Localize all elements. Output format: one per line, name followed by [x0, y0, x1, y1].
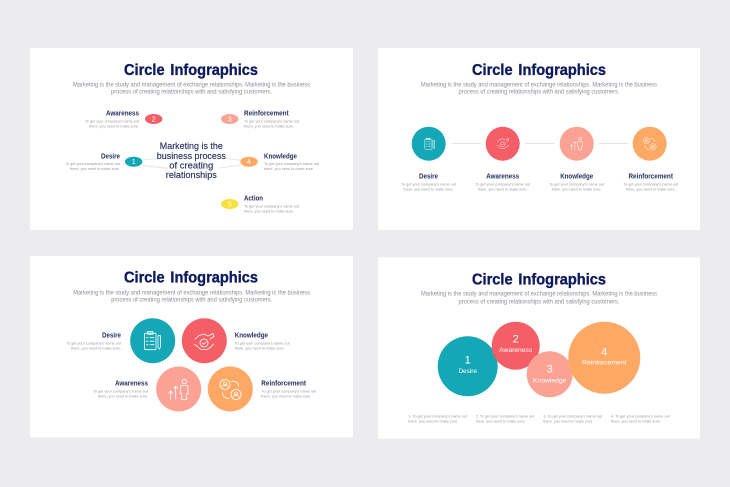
panel: bottom-left four icon circles — [30, 256, 353, 438]
item: Desire: Desire — [101, 153, 120, 160]
title: Circle Infographics — [472, 271, 606, 288]
step: Awareness: there, you need to make sure. — [478, 186, 528, 191]
note 4: 4. To get your company's name out — [611, 413, 671, 418]
item: Desire — [65, 153, 142, 171]
item: Reinforcement: Reinforcement — [244, 110, 289, 117]
item: Awareness: Awareness — [106, 110, 139, 117]
item: Reinforcement: To get your company's name out — [261, 389, 317, 394]
step: Desire: Desire — [419, 174, 438, 181]
central statement: Marketing is the — [160, 141, 223, 152]
step: Reinforcement: there, you need to make sure. — [626, 186, 676, 191]
item: Knowledge: there, you need to make sure. — [264, 166, 314, 171]
item: Reinforcement — [221, 110, 300, 128]
subtitle — [73, 81, 311, 96]
bubble: Reinforcement: Reinforcement — [582, 360, 627, 367]
item: Knowledge: To get your company's name out — [264, 161, 320, 166]
subtitle — [73, 289, 311, 304]
step: Knowledge: To get your company's name out — [549, 182, 605, 187]
subtitle: process of creating relationships with and satisfying customers. — [458, 89, 620, 96]
panel: bottom-right bubble chart — [378, 258, 700, 438]
item: Action — [221, 195, 300, 213]
item: Awareness: there, you need to make sure. — [89, 123, 139, 128]
subtitle: Marketing is the study and management of exchange relationships. Marketing is the business — [421, 81, 658, 88]
central statement: relationships — [166, 170, 217, 181]
note 1: there, you need to make sure. — [408, 418, 458, 423]
item: Desire — [66, 318, 175, 363]
item: Action: To get your company's name out — [244, 203, 300, 208]
step: Reinforcement: To get your company's name out — [623, 182, 679, 187]
item: Awareness: To get your company's name out — [93, 389, 149, 394]
bubble: Desire — [438, 336, 498, 396]
item: Awareness: To get your company's name out — [85, 118, 140, 123]
bubble: Reinforcement — [568, 322, 640, 394]
item: Desire: Desire — [102, 333, 121, 340]
step: Reinforcement: Reinforcement — [628, 174, 674, 181]
item: Knowledge: there, you need to make sure. — [235, 345, 285, 350]
step: Knowledge: Knowledge — [560, 174, 593, 181]
note 1: 1. To get your company's name out — [408, 413, 468, 418]
bubble: Reinforcement: 4 — [601, 346, 607, 358]
bubble: Awareness: Awareness — [499, 347, 533, 354]
item: Desire: there, you need to make sure. — [70, 166, 120, 171]
step: Awareness — [475, 127, 531, 191]
title: Circle Infographics — [124, 62, 258, 79]
item: Awareness: Awareness — [115, 381, 148, 388]
item: Reinforcement: Reinforcement — [261, 381, 307, 388]
panel: top-right circle process — [378, 48, 700, 230]
step: Reinforcement — [623, 127, 679, 191]
bubble: Awareness — [492, 322, 540, 370]
bubble: Knowledge: 3 — [547, 363, 553, 375]
step: Knowledge — [549, 127, 605, 191]
title: Circle Infographics — [124, 270, 258, 287]
note 2 — [476, 413, 535, 423]
note 1 — [408, 413, 468, 423]
subtitle — [421, 291, 658, 305]
subtitle: process of creating relationships with and satisfying customers. — [111, 297, 272, 304]
note 2: 2. To get your company's name out — [476, 413, 535, 418]
subtitle: Marketing is the study and management of exchange relationships. Marketing is the business — [421, 291, 658, 298]
subtitle — [421, 81, 658, 96]
item: Awareness: 2 — [152, 116, 156, 124]
item: Reinforcement: 3 — [228, 116, 232, 124]
item: Reinforcement: there, you need to make sure. — [261, 393, 311, 398]
bubble: Knowledge: Knowledge — [533, 377, 567, 384]
arrows between steps — [451, 142, 628, 144]
item: Knowledge: To get your company's name out — [235, 341, 291, 346]
item: Knowledge: Knowledge — [264, 153, 297, 160]
subtitle: process of creating relationships with and satisfying customers. — [458, 298, 620, 305]
note 3: 3. To get your company's name out — [543, 413, 603, 418]
panel: top-left numbered circles — [30, 48, 353, 230]
item: Reinforcement: there, you need to make sure. — [244, 123, 294, 128]
step: Awareness: Awareness — [486, 174, 519, 181]
item: Reinforcement — [208, 366, 317, 412]
note 2: there, you need to make sure. — [476, 418, 526, 423]
item: Knowledge — [240, 153, 320, 171]
item: Knowledge: Knowledge — [235, 333, 268, 340]
item: Action: Action — [244, 195, 263, 202]
note 3 — [543, 413, 603, 423]
item: Desire: there, you need to make sure. — [71, 345, 121, 350]
bubble: Desire: 1 — [465, 354, 471, 366]
item: Awareness — [93, 366, 201, 412]
item: Reinforcement: To get your company's name out — [244, 118, 300, 123]
subtitle: process of creating relationships with and satisfying customers. — [111, 89, 272, 96]
item: Action: 5 — [228, 202, 232, 208]
item: Awareness — [85, 110, 162, 128]
central statement: of creating — [169, 161, 213, 172]
item: Desire: To get your company's name out — [66, 341, 122, 346]
step: Desire — [401, 127, 457, 191]
central statement: business process — [157, 151, 226, 162]
step: Desire: To get your company's name out — [401, 182, 457, 187]
note 4 — [611, 413, 671, 423]
central statement — [157, 141, 226, 181]
step: Desire: there, you need to make sure. — [404, 186, 454, 191]
connector lines — [142, 158, 240, 168]
item: Action: there, you need to make sure. — [244, 208, 294, 213]
bubble: Knowledge — [527, 351, 573, 397]
step: Awareness: To get your company's name out — [475, 182, 531, 187]
item: Desire: 1 — [132, 159, 136, 166]
subtitle: Marketing is the study and management of exchange relationships. Marketing is the business — [73, 81, 311, 88]
subtitle: Marketing is the study and management of exchange relationships. Marketing is the business — [73, 289, 311, 296]
item: Awareness: there, you need to make sure. — [98, 393, 148, 398]
item: Desire: To get your company's name out — [65, 161, 121, 166]
bubble: Awareness: 2 — [513, 334, 519, 346]
note 4: there, you need to make sure. — [611, 418, 661, 423]
item: Knowledge — [182, 318, 291, 363]
title: Circle Infographics — [472, 62, 606, 79]
step: Knowledge: there, you need to make sure. — [552, 186, 602, 191]
bubble: Desire: Desire — [458, 368, 477, 375]
item: Knowledge: 4 — [247, 159, 251, 166]
note 3: there, you need to make sure. — [543, 418, 593, 423]
